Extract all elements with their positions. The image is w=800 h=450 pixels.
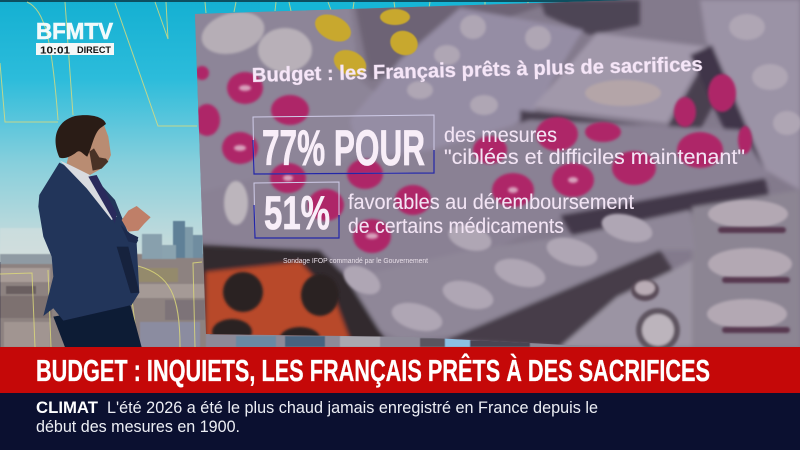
presenter shirt and tie [60, 161, 117, 220]
BFMTV logo [36, 18, 114, 56]
clock and direct tag [36, 43, 114, 56]
photo dark shadows under pills [718, 227, 790, 333]
text: reimbursement description: favorables au déremboursement [348, 191, 634, 214]
news ticker: CLIMAT [36, 398, 99, 417]
presenter face [67, 125, 111, 175]
presenter sleeve cuff [121, 225, 138, 243]
stat box: 77% POUR [253, 115, 434, 176]
text: reimbursement description: de certains médicaments [348, 215, 564, 238]
presenter hair [56, 115, 106, 158]
photo blister packs [190, 0, 800, 347]
text: measures description: des mesures [444, 124, 557, 147]
news ticker: début des mesures en 1900. [36, 417, 240, 436]
BFMTV logo: BFMTV [36, 18, 114, 44]
stat box: 51% [254, 182, 339, 239]
studio background: yellow line graphics [0, 2, 528, 347]
photo light pills [197, 5, 800, 336]
photo yellow pills [311, 9, 421, 81]
studio background: city view [0, 221, 636, 348]
presenter jacket [38, 163, 139, 321]
clock and direct tag: DIRECT [77, 45, 112, 55]
news ticker: L'été 2026 a été le plus chaud jamais enregistré en France depuis le [107, 398, 598, 417]
photo pink pill highlights [234, 85, 578, 239]
source note: Sondage IFOP commandé par le Gouvernement [283, 258, 428, 265]
text: measures description: "ciblées et difficiles maintenant" [444, 146, 745, 169]
presenter hands [122, 206, 151, 232]
news ticker [0, 393, 800, 450]
text: measures description [444, 124, 745, 169]
photo dark pills on orange blister [210, 270, 339, 336]
text: reimbursement description [348, 191, 634, 238]
screen panel: blister-pack photograph [190, 0, 800, 352]
photo pink pills [194, 66, 752, 253]
presenter [38, 115, 151, 347]
presenter legs [53, 303, 142, 347]
stat box: 77% POUR: 77% POUR [262, 120, 425, 176]
presenter beard [89, 148, 108, 171]
photo ring pill [631, 279, 680, 352]
clock and direct tag: 10:01 [40, 44, 70, 56]
presenter jacket shadow [117, 247, 139, 293]
stat box: 51%: 51% [264, 186, 330, 239]
panel title: Budget : les Français prêts à plus de sacrifices [252, 54, 703, 87]
studio background: sky [0, 0, 800, 262]
